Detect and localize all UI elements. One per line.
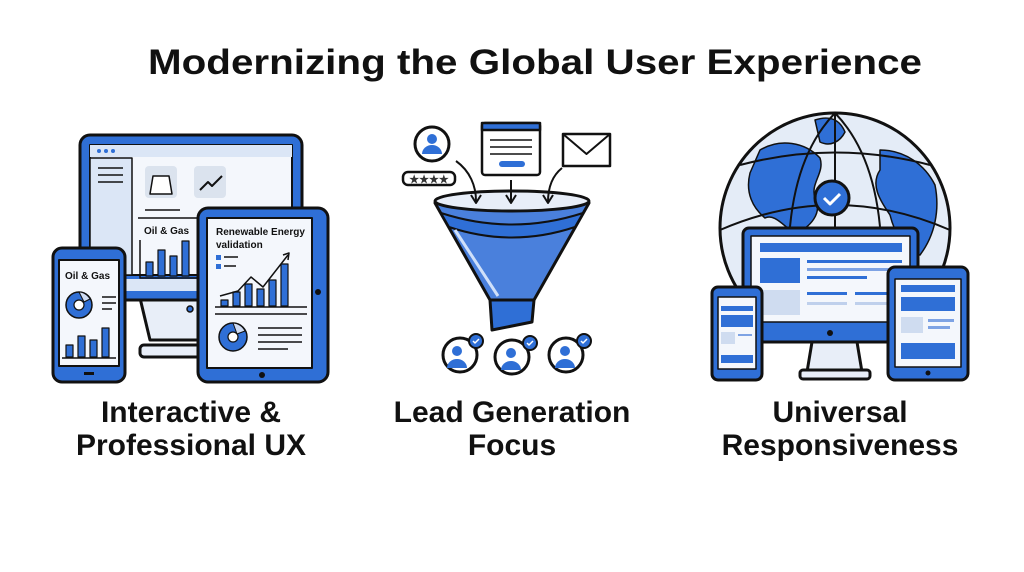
caption: interactive & professional UX xyxy=(76,396,306,462)
icon: user profile xyxy=(403,127,455,186)
caption: universal responsiveness xyxy=(722,396,958,462)
caption: interactive & professional UX: Professional UX xyxy=(76,429,306,462)
icon: user profile: ★★★★ xyxy=(409,174,449,186)
icon: funnel xyxy=(435,191,589,330)
caption: universal responsiveness: Universal xyxy=(772,396,908,429)
icon: phone xyxy=(53,248,125,382)
caption: lead generation focus: Focus xyxy=(468,429,556,462)
icon: web form xyxy=(482,123,540,175)
caption: universal responsiveness: Responsiveness xyxy=(722,429,958,462)
icon: tablet xyxy=(888,267,968,380)
caption: lead generation focus: Lead Generation xyxy=(394,396,630,429)
icon: desktop monitor: Oil & Gas xyxy=(144,226,189,237)
icon: tablet xyxy=(198,208,328,382)
icon: envelope xyxy=(563,134,610,166)
panel: responsive globe illustration xyxy=(712,113,968,380)
title: Modernizing the Global User Experience xyxy=(148,43,922,82)
caption: interactive & professional UX: Interactive & xyxy=(101,396,281,429)
icon: globe xyxy=(720,113,950,343)
icon: converted leads xyxy=(443,334,591,374)
caption: lead generation focus xyxy=(394,396,630,462)
icon: tablet: Renewable Energy xyxy=(216,227,305,238)
icon: phone xyxy=(712,287,762,380)
icon: phone: Oil & Gas xyxy=(65,271,110,282)
icon: tablet: validation xyxy=(216,240,263,251)
icon: desktop monitor xyxy=(743,228,918,379)
panel: interactive devices illustration xyxy=(53,135,328,382)
panel: lead funnel illustration xyxy=(403,123,610,374)
icon: desktop monitor xyxy=(80,135,302,357)
arrows into funnel xyxy=(456,161,562,203)
